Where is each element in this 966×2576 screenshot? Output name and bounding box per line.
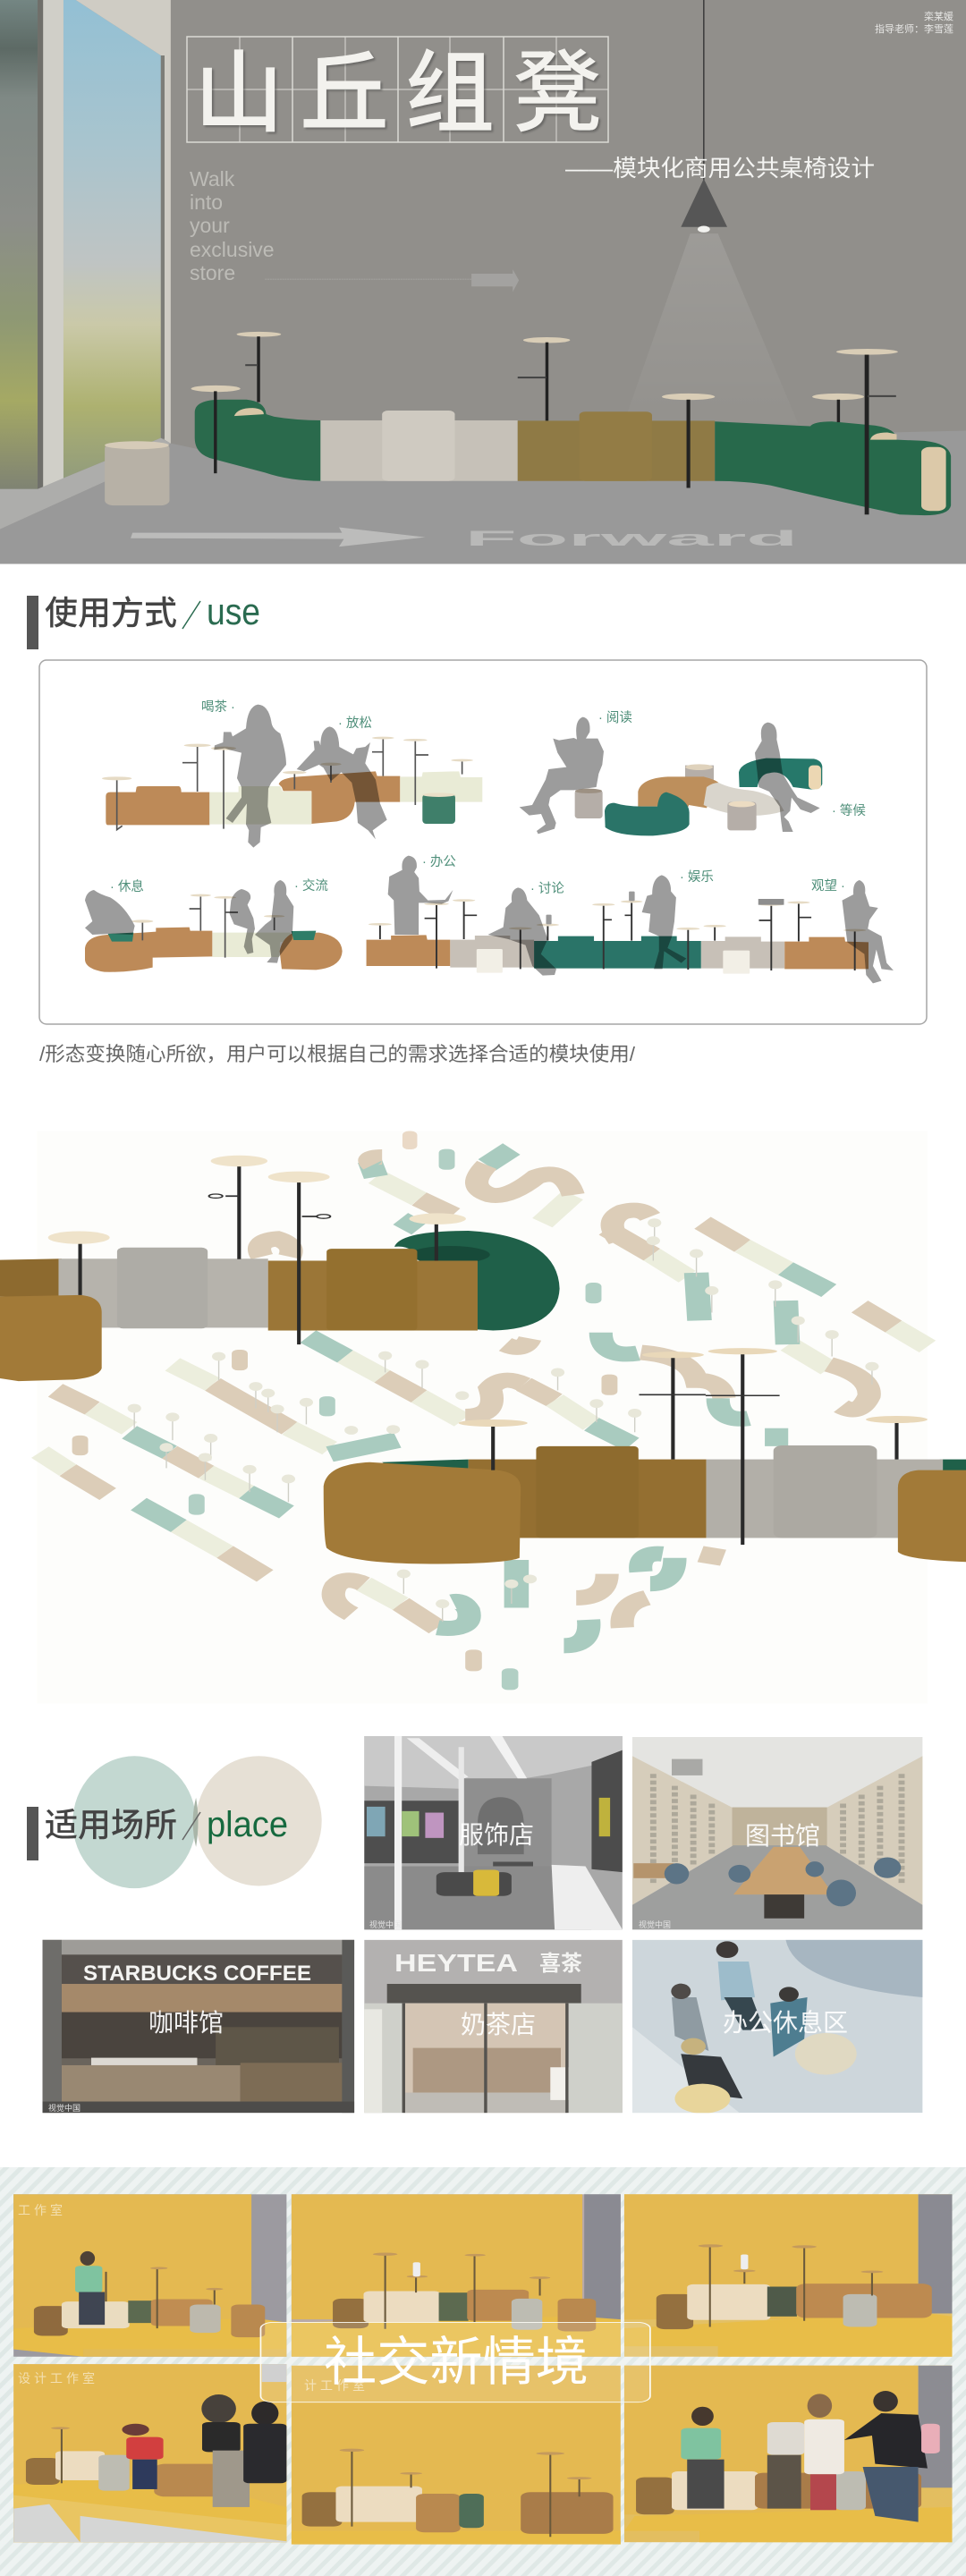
scene: long bench [367, 856, 894, 983]
scene: rest and exchange [85, 880, 343, 972]
photo watermarks: 视觉中国 [48, 2103, 80, 2113]
silhouette: discussing woman [487, 887, 556, 976]
usage labels: · 阅读 [598, 710, 632, 725]
silhouette: standing woman [214, 705, 286, 848]
floor lettering: Forward [465, 527, 798, 551]
section: usage [27, 590, 927, 1065]
place labels: 图书馆 [745, 1822, 820, 1850]
place labels: 奶茶店 [461, 2011, 536, 2038]
photo F: family at bench [624, 2366, 953, 2542]
bench set [367, 935, 869, 974]
pale panel [37, 1131, 928, 1704]
usage frame [39, 660, 927, 1024]
small tables [131, 894, 284, 958]
floor [0, 430, 966, 564]
author credits: 栾某媛 [924, 10, 953, 22]
modular bench [195, 400, 951, 515]
bench set [85, 928, 343, 972]
photo sign text: 喜茶 [539, 1952, 582, 1976]
heading: use [45, 590, 260, 632]
author credits: 指导老师：李雪莲 [875, 22, 953, 35]
photo collage [13, 2194, 953, 2545]
silhouette: relaxing person [297, 726, 387, 839]
window and frame [0, 0, 171, 530]
small tables [369, 892, 866, 970]
silhouette: reader [520, 717, 604, 834]
scene: tea and relax [102, 705, 482, 848]
heading bar [27, 1807, 38, 1860]
photo: office lounge [632, 1940, 922, 2114]
photo B: empty bench [292, 2194, 621, 2357]
scattered modules: straight tan [55, 1199, 894, 1628]
hatched background [0, 2167, 966, 2576]
heading: place [45, 1805, 288, 1844]
usage labels: 观望 · [811, 878, 845, 894]
usage caption: /形态变换随心所欲，用户可以根据自己的需求选择合适的模块使用/ [39, 1043, 636, 1065]
photo: library [632, 1737, 922, 1929]
photo E: split bench [292, 2366, 621, 2545]
lower render: tables [459, 1348, 928, 1545]
miniature tables [128, 1218, 879, 1622]
modular curve set [575, 758, 822, 835]
photo wall lettering: 设计工作室 [18, 2371, 98, 2385]
usage labels: · 讨论 [530, 881, 564, 896]
photo wall lettering: 工作室 [18, 2203, 66, 2217]
usage labels: · 放松 [338, 716, 372, 731]
photos [43, 1736, 922, 2114]
place labels: 咖啡馆 [148, 2009, 224, 2037]
silhouette: office worker [388, 856, 453, 935]
silhouette: woman with phone [642, 875, 686, 969]
hero scene shapes [0, 0, 966, 564]
photo wall lettering [18, 2203, 369, 2393]
collage title: 社交新情境 [324, 2333, 589, 2392]
place labels: 办公休息区 [723, 2009, 848, 2037]
photo watermarks: 视觉中国 [369, 1919, 402, 1929]
photo wall lettering: 计工作室 [304, 2378, 369, 2393]
silhouette: watching person [843, 880, 894, 983]
usage labels: · 休息 [110, 879, 144, 894]
title: 山丘组凳 [194, 44, 602, 144]
upper render: tables [48, 1156, 466, 1344]
author credits [875, 10, 953, 35]
usage labels: · 办公 [422, 854, 456, 869]
bench segments [106, 771, 482, 825]
hero panel: showroom render [0, 0, 966, 564]
usage labels: · 娱乐 [680, 869, 714, 885]
wall slogan: your [190, 214, 230, 237]
back wall [0, 0, 966, 564]
small tables [102, 737, 473, 830]
photo A: boy on bench [13, 2194, 286, 2357]
section: applicable places [27, 1736, 922, 2114]
place labels [148, 1821, 848, 2038]
photo watermarks [48, 1919, 671, 2113]
scattered modules: straight sage [130, 1149, 829, 1608]
place labels: 服饰店 [459, 1821, 534, 1849]
section: module composition render [0, 1131, 966, 1704]
scattered modules: curved sage [401, 1219, 776, 1646]
subtitle: ——模块化商用公共桌椅设计 [565, 155, 875, 182]
usage labels: 喝茶 · [201, 699, 235, 715]
usage labels: · 等候 [832, 802, 866, 818]
photo: clothing store [364, 1736, 623, 1929]
floor arrow [131, 528, 425, 547]
photo sign text: STARBUCKS COFFEE [83, 1962, 311, 1986]
side tables [191, 332, 898, 514]
scattered modules: curved tan [259, 1157, 869, 1628]
silhouette: waiting person [755, 723, 820, 832]
pendant lamp [623, 0, 798, 427]
scattered modules: straight cream [40, 1177, 928, 1604]
lower render: bench [324, 1445, 966, 1563]
scattered stools [72, 1131, 617, 1690]
wall slogan [190, 167, 275, 284]
heading: place: place [207, 1805, 288, 1844]
photo D: family group [13, 2364, 286, 2542]
usage labels: · 交流 [294, 877, 328, 894]
title grid [187, 37, 608, 142]
photo sign text [83, 1949, 582, 1986]
wall arrow [265, 269, 519, 292]
photo: coffee shop [43, 1940, 354, 2113]
heading bar [27, 596, 38, 649]
upper render: bench with arch [0, 1231, 560, 1381]
heading: use: use [207, 590, 260, 632]
wall slogan: into [190, 191, 223, 214]
heading circles [72, 1756, 322, 1888]
photo watermarks: 视觉中国 [639, 1919, 671, 1929]
section: social scenes [0, 2167, 966, 2576]
wall slogan: exclusive [190, 238, 275, 261]
wall slogan: store [190, 261, 235, 284]
usage labels [110, 699, 866, 896]
heading: place: 适用场所 [45, 1807, 177, 1843]
round stool [105, 441, 169, 505]
heading: use: 使用方式 [45, 595, 177, 631]
photo sign text: HEYTEA [394, 1949, 518, 1977]
photo C: empty bench [624, 2194, 953, 2357]
photo: milk tea shop [364, 1940, 623, 2113]
silhouette: talking adult [255, 880, 293, 963]
title frame [260, 2322, 650, 2402]
wall slogan: Walk [190, 167, 235, 191]
silhouette: resting person [85, 890, 135, 935]
silhouette: talking child [230, 889, 255, 954]
scene: reading and waiting [520, 717, 822, 835]
